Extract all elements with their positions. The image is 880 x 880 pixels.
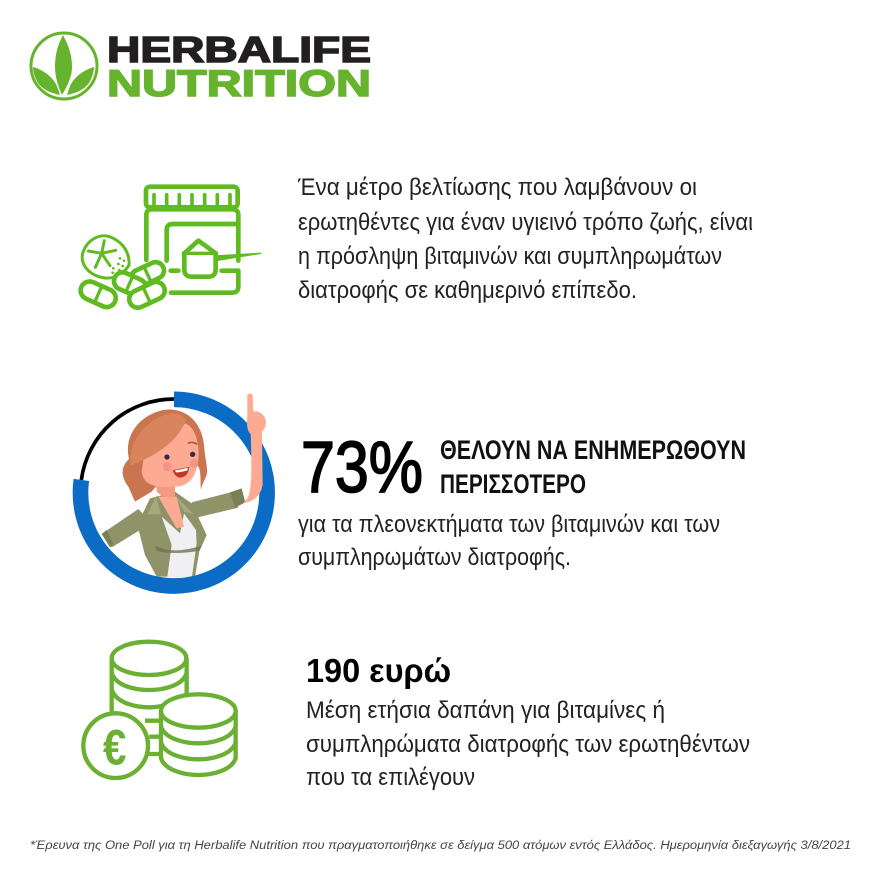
stat heading: ΠΕΡΙΣΣΟΤΕΡΟ	[440, 469, 586, 499]
illustration: woman	[102, 409, 245, 577]
heading: 190 euros: 190 ευρώ	[306, 653, 451, 690]
ring: 73 percent arc	[80, 399, 267, 586]
text block: daily vitamin intake	[297, 174, 753, 304]
footnote: *Έρευνα της One Poll για τη Herbalife Nutrition που πραγματοποιήθηκε σε δείγμα 500 ατόμων εντός Ελλάδος. Ημερομηνία διεξαγωγής 3/8/2021	[30, 838, 851, 852]
text block: daily vitamin intake: διατροφής σε καθημερινό επίπεδο.	[298, 277, 637, 304]
stat description: συμπληρωμάτων διατροφής.	[298, 544, 571, 571]
logo wordmark: NUTRITION: NUTRITION	[107, 63, 371, 104]
logo wordmark: HERBALIFE: HERBALIFE	[107, 29, 371, 70]
stat heading: ΘΕΛΟΥΝ ΝΑ ΕΝΗΜΕΡΩΘΟΥΝ	[440, 435, 746, 465]
icon: coin stacks with euro	[83, 642, 236, 778]
logo: Herbalife Nutrition	[31, 29, 371, 104]
icon: supplement jar, scoop, lemon and capsules	[78, 187, 261, 311]
chart: 73 percent ring with woman illustration	[80, 393, 267, 586]
text block: daily vitamin intake: Ένα μέτρο βελτίωσης που λαμβάνουν οι	[297, 174, 697, 201]
euro symbol: €	[103, 719, 126, 775]
stat: 73%	[298, 428, 746, 571]
text block: daily vitamin intake: η πρόσληψη βιταμινών και συμπληρωμάτων	[298, 243, 722, 270]
stat: 73%: 73%	[301, 428, 423, 508]
stat heading	[440, 435, 746, 499]
stat description	[298, 511, 720, 571]
icon: logo leaf circle	[31, 33, 97, 99]
text block: annual spending: που τα επιλέγουν	[306, 764, 475, 791]
text block: annual spending: Μέση ετήσια δαπάνη για βιταμίνες ή	[306, 697, 665, 724]
ring remainder	[81, 399, 174, 480]
stat description: για τα πλεονεκτήματα των βιταμινών και των	[298, 511, 720, 538]
text block: daily vitamin intake: ερωτηθέντες για έναν υγιεινό τρόπο ζωής, είναι	[298, 209, 753, 236]
illustration: raised arm and pointing hand	[243, 393, 266, 503]
text block: annual spending	[306, 653, 750, 791]
text block: annual spending: συμπληρώματα διατροφής των ερωτηθέντων	[306, 731, 750, 758]
